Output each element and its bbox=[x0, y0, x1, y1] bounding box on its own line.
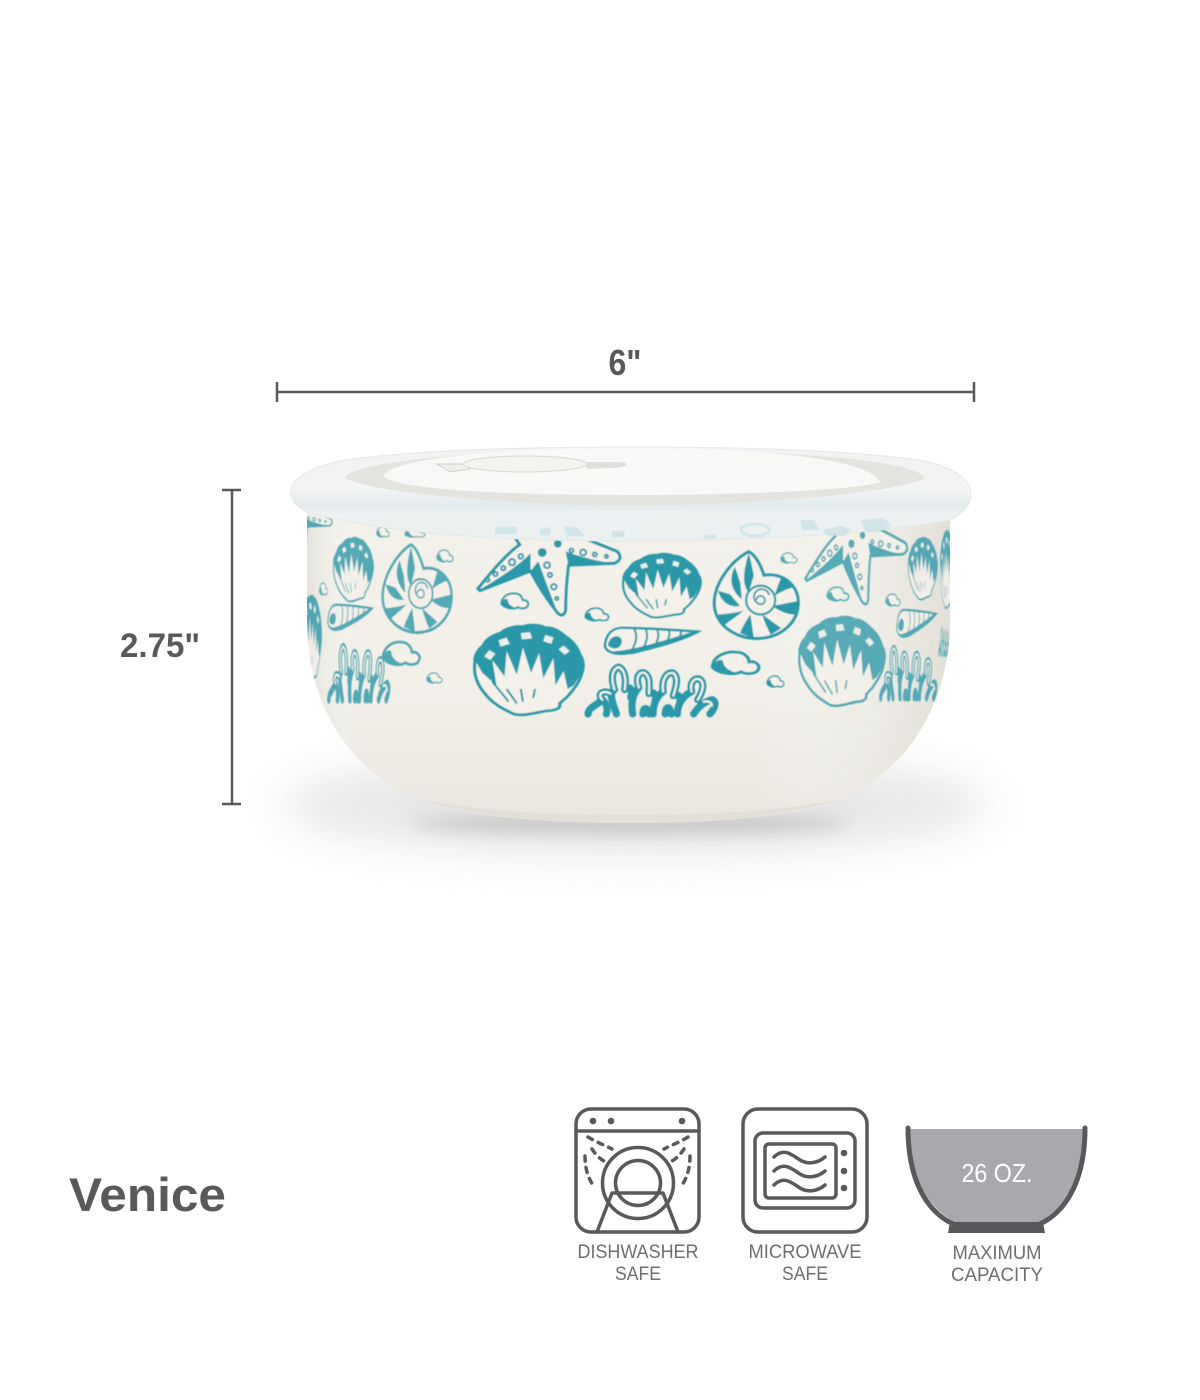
label: dishwasher safe: SAFE bbox=[615, 1263, 661, 1285]
label: microwave safe: SAFE bbox=[782, 1263, 828, 1285]
lid valve dome bbox=[383, 448, 880, 495]
width dimension: 6 inches: 6" bbox=[608, 342, 642, 383]
product name: Venice bbox=[69, 1168, 226, 1221]
valve tab bbox=[437, 456, 627, 472]
capacity value: 26 OZ. bbox=[962, 1158, 1032, 1188]
height dimension: 2.75 inches bbox=[120, 490, 241, 804]
label: microwave safe: MICROWAVE bbox=[748, 1241, 862, 1263]
height dimension: 2.75 inches: 2.75" bbox=[120, 627, 200, 665]
label: maximum capacity: CAPACITY bbox=[951, 1264, 1043, 1286]
icon: maximum capacity bowl bbox=[908, 1128, 1085, 1286]
seashell pattern bbox=[263, 506, 954, 715]
faint pattern through the lid bbox=[495, 518, 892, 539]
bowl body bbox=[307, 505, 950, 823]
icon: microwave safe bbox=[743, 1109, 867, 1285]
bowl shadow bbox=[280, 755, 990, 855]
width dimension: 6 inches bbox=[277, 342, 974, 402]
product photo: ceramic bowl with lid bbox=[263, 447, 990, 855]
lid rim and translucent band bbox=[291, 447, 971, 541]
label: dishwasher safe: DISHWASHER bbox=[578, 1241, 698, 1263]
lid recess bbox=[345, 450, 925, 505]
centre motifs bbox=[475, 530, 798, 715]
left motifs bbox=[307, 512, 454, 704]
label: maximum capacity: MAXIMUM bbox=[952, 1242, 1042, 1264]
plastic lid bbox=[291, 447, 971, 541]
icon: dishwasher safe bbox=[576, 1109, 699, 1285]
right motifs bbox=[781, 522, 954, 706]
